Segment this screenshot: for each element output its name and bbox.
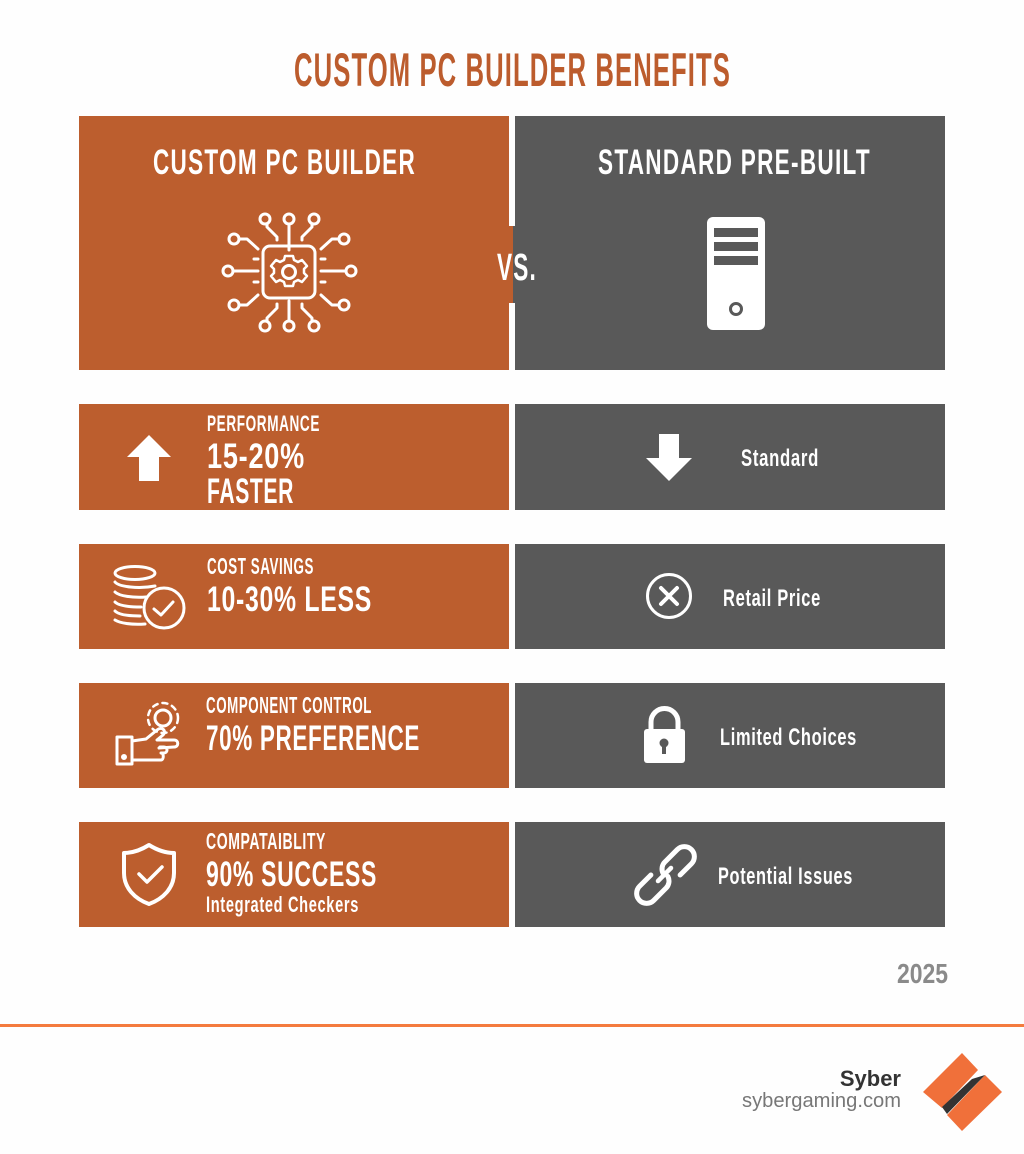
text: compatibility: 90% SUCCESS <box>206 855 377 894</box>
row: compatibility custom <box>79 822 509 927</box>
row: compatibility standard <box>515 822 945 927</box>
icon: chain link <box>632 842 699 908</box>
row: cost savings custom <box>79 544 509 649</box>
icon: circled x <box>648 574 690 618</box>
footer brand name: Syber <box>840 1066 901 1091</box>
text: component control <box>206 692 420 758</box>
heading: standard pre-built: STANDARD PRE-BUILT <box>598 143 871 182</box>
text: component control: COMPONENT CONTROL <box>206 692 372 718</box>
heading: custom PC builder: CUSTOM PC BUILDER <box>153 143 416 182</box>
row: component control custom <box>79 683 509 788</box>
text: standard: Standard <box>741 445 819 472</box>
text: potential issues: Potential Issues <box>718 863 853 890</box>
icon: up arrow <box>127 435 171 481</box>
text: performance: PERFORMANCE <box>207 411 320 436</box>
icon: PC tower <box>707 217 765 330</box>
text: performance: FASTER <box>207 472 294 511</box>
icon: chip with gear <box>223 214 356 331</box>
panel: standard pre-built header <box>513 116 945 370</box>
text: performance <box>207 411 320 511</box>
text: cost savings: COST SAVINGS <box>207 553 314 579</box>
text: retail price: Retail Price <box>723 585 821 612</box>
text: component control: 70% PREFERENCE <box>206 719 420 758</box>
footer rule <box>0 1024 1024 1027</box>
label: versus: VS. <box>497 247 537 289</box>
icon: padlock <box>644 708 685 763</box>
text: compatibility <box>206 828 377 917</box>
icon: hand with gear <box>117 703 178 764</box>
text: compatibility: Integrated Checkers <box>206 892 359 917</box>
text: compatibility: COMPATAIBLITY <box>206 828 326 854</box>
icon: shield with check <box>124 845 174 904</box>
footer website: sybergaming.com <box>742 1090 901 1112</box>
row: cost savings standard <box>515 544 945 649</box>
panel: custom PC builder header <box>79 116 513 370</box>
row: performance custom <box>79 404 509 511</box>
text: limited choices: Limited Choices <box>720 724 857 751</box>
text: cost savings <box>207 553 372 619</box>
text: cost savings: 10-30% LESS <box>207 580 372 619</box>
year label: 2025 <box>897 958 948 989</box>
text: performance: 15-20% <box>207 437 305 476</box>
icon: down arrow <box>646 434 692 481</box>
row: component control standard <box>515 683 945 788</box>
row: performance standard <box>515 404 945 510</box>
icon: Syber logo <box>923 1053 1002 1131</box>
icon: coins with check <box>115 566 184 628</box>
